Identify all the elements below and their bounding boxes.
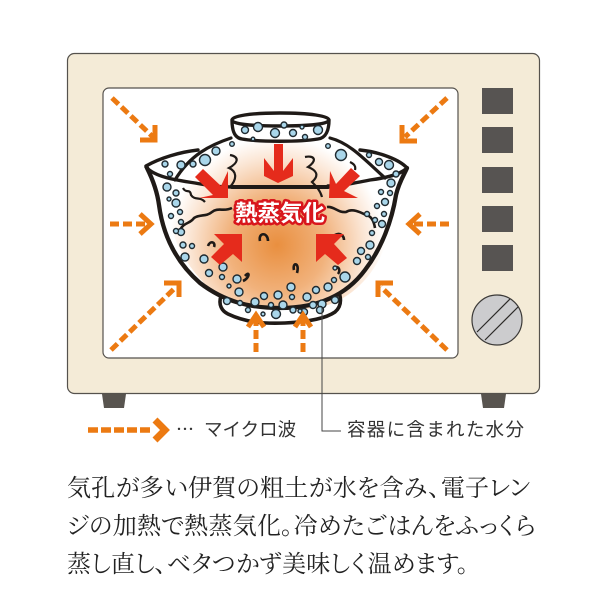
bowl with lid bbox=[146, 113, 407, 323]
description text: ジの加熱で熱蒸気化。冷めたごはんをふっくら bbox=[67, 513, 535, 540]
dial knob bbox=[472, 295, 522, 345]
oven window bbox=[103, 88, 458, 358]
description text: 蒸し直し、ベタつかず美味しく温めます。 bbox=[67, 551, 469, 578]
arrow: bottom up left bbox=[248, 315, 264, 352]
microwave oven bbox=[68, 54, 540, 408]
heat glow bbox=[165, 138, 391, 310]
leader line bbox=[322, 308, 341, 431]
red arrows converging bbox=[195, 144, 360, 265]
description text bbox=[67, 475, 535, 578]
arrow: bottom right bbox=[378, 283, 447, 350]
legend arrow bbox=[88, 420, 165, 440]
oven body bbox=[68, 54, 540, 394]
leader label: 容器に含まれた水分 bbox=[347, 419, 524, 440]
bowl outline bbox=[146, 113, 407, 323]
label: 熱蒸気化: 熱蒸気化 bbox=[235, 201, 325, 226]
arrow: middle left bbox=[110, 214, 151, 234]
legend label: マイクロ波 bbox=[204, 419, 296, 440]
rice surface line bbox=[180, 207, 375, 230]
arrow: bottom left bbox=[111, 283, 179, 350]
arrow: top right bbox=[402, 98, 447, 141]
steam squiggles bbox=[183, 155, 355, 202]
water bubbles bbox=[162, 122, 399, 318]
legend bbox=[88, 416, 296, 442]
arrow: middle right bbox=[409, 214, 449, 234]
arrow: bottom up right bbox=[295, 315, 311, 352]
microwave arrows bbox=[110, 98, 449, 352]
control buttons bbox=[482, 88, 513, 271]
oven foot left bbox=[102, 394, 126, 408]
legend dots: … bbox=[176, 416, 194, 442]
oven foot right bbox=[481, 394, 506, 408]
small steam marks bbox=[208, 234, 344, 281]
description text: 気孔が多い伊賀の粗土が水を含み、電子レン bbox=[67, 475, 530, 502]
arrow: top left bbox=[112, 98, 155, 140]
